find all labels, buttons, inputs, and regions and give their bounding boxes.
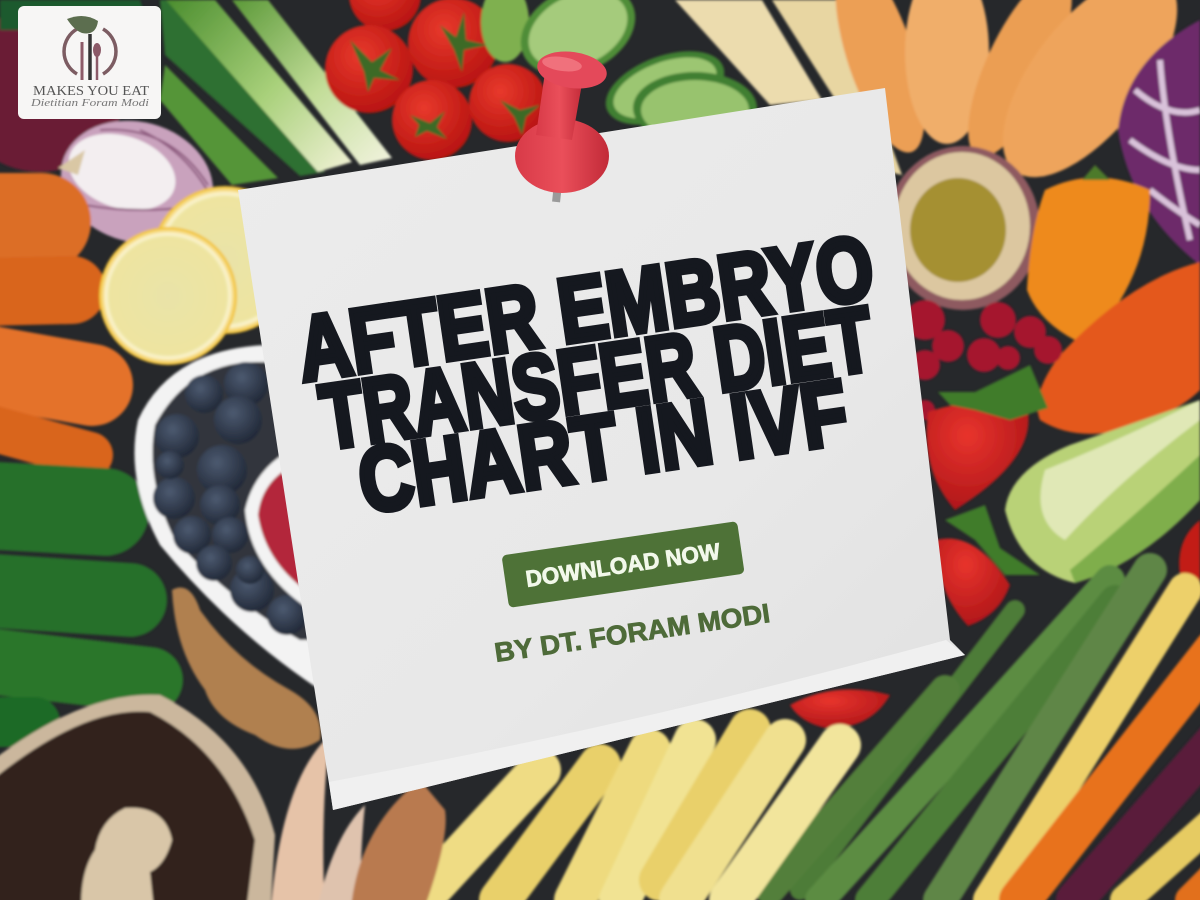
- button: download now: DOWNLOAD NOW: [524, 538, 722, 592]
- byline: BY DT. FORAM MODI: [493, 598, 772, 668]
- asparagus: [770, 570, 1150, 900]
- button: download now: [501, 521, 745, 608]
- cucumbers left: [0, 505, 150, 722]
- title: [291, 217, 880, 533]
- title: AFTER EMBRYO: [291, 217, 880, 401]
- carrots left: [0, 222, 92, 455]
- red push pin: [515, 47, 609, 202]
- paper note: [238, 88, 965, 810]
- logo mark: [64, 16, 116, 80]
- colourful carrots right: [990, 590, 1200, 900]
- baby corn: [420, 730, 840, 900]
- bowl of blueberries: [134, 345, 340, 690]
- ginger: [172, 588, 321, 749]
- red-orange pepper: [1038, 262, 1200, 434]
- red berries: [905, 300, 1062, 420]
- cucumber slices: [481, 0, 757, 144]
- logo name: MAKES YOU EAT: [33, 84, 149, 99]
- title: CHART IN IVF: [352, 362, 854, 533]
- parsnips: [675, 0, 902, 175]
- sweet potatoes: [817, 0, 1200, 206]
- title: TRANSFER DIET: [314, 289, 879, 469]
- shallots bottom centre: [270, 735, 446, 900]
- paper curl: [329, 640, 965, 810]
- purple cabbage: [1118, 20, 1200, 265]
- bok choy: [1005, 400, 1200, 583]
- red pepper right edge: [1179, 520, 1200, 600]
- logo card: [18, 6, 161, 119]
- strawberries: [790, 365, 1048, 728]
- logo tagline: Dietitian Foram Modi: [30, 97, 149, 109]
- passion fruit: [886, 146, 1040, 310]
- red onion and leeks, top left: [0, 0, 392, 185]
- tomatoes: [325, 0, 547, 160]
- cut onion: [47, 104, 227, 260]
- lemons: [99, 186, 299, 365]
- portobello mushroom: [0, 695, 275, 900]
- orange pepper: [1027, 165, 1150, 345]
